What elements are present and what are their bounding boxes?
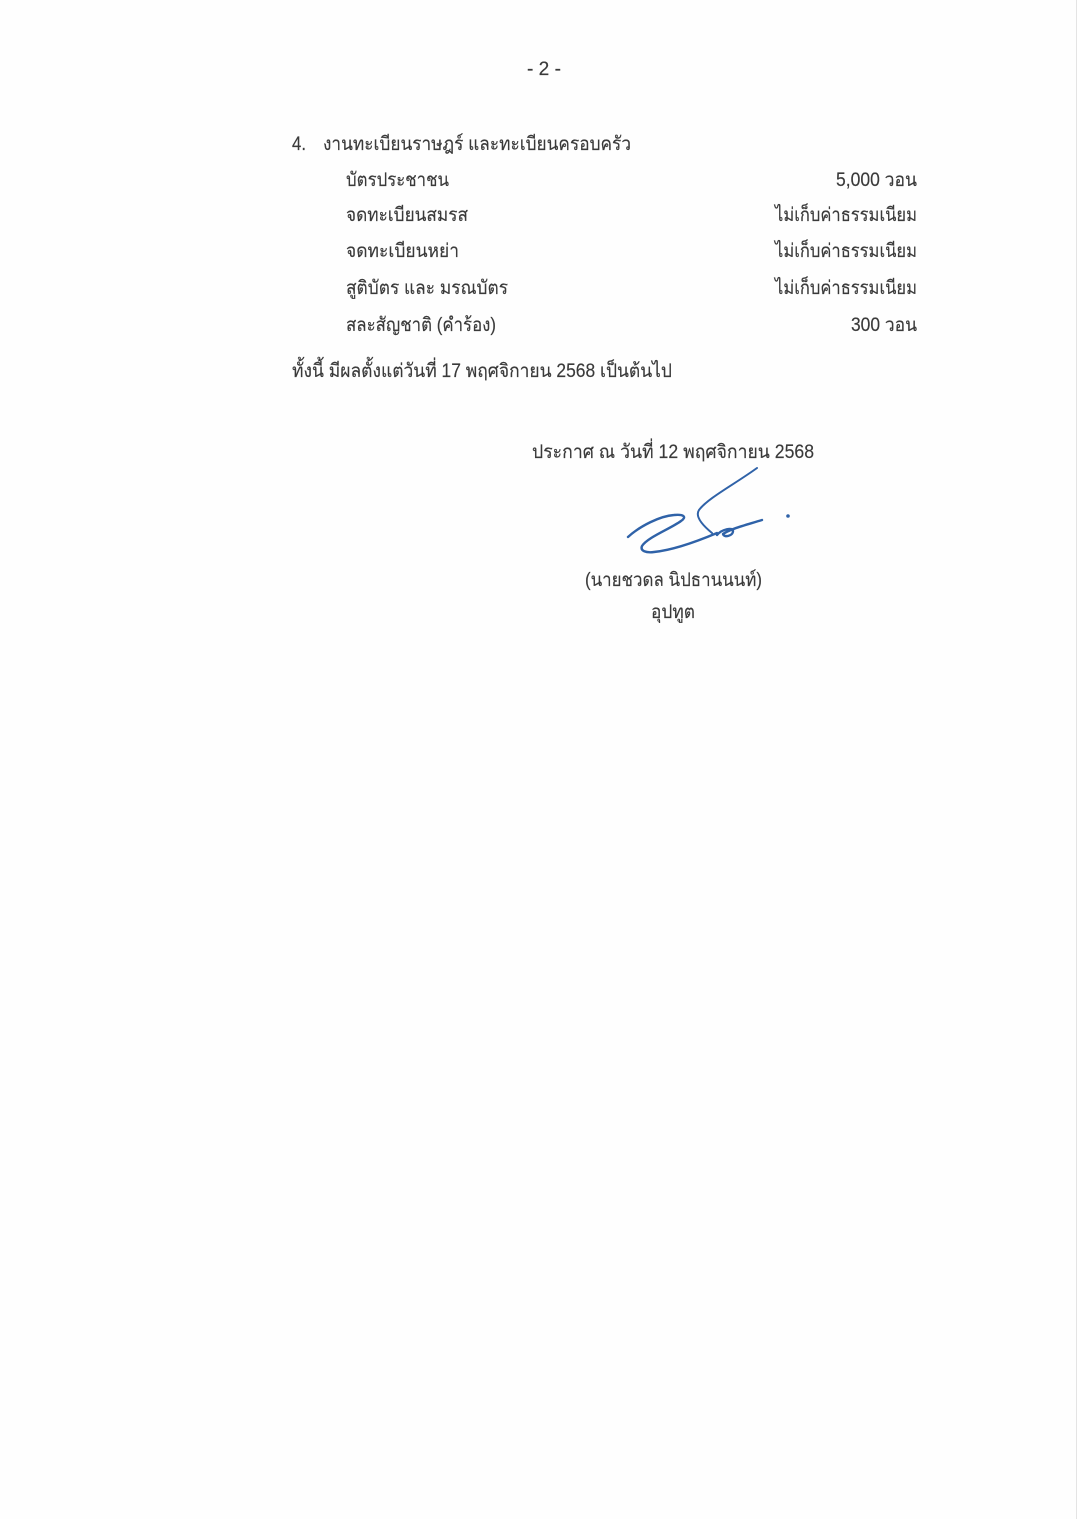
row: renunciation of nationality: 300 วอน	[851, 315, 917, 336]
row: birth and death certificates: สูติบัตร และ มรณบัตร	[346, 278, 508, 299]
row: birth and death certificates	[346, 275, 917, 299]
signatory name: (นายชวดล นิปธานนนท์)	[585, 569, 762, 591]
page number: - 2 -	[527, 59, 561, 80]
row: marriage registration: ไม่เก็บค่าธรรมเนียม	[773, 202, 917, 226]
row: marriage registration	[346, 202, 917, 226]
row: birth and death certificates: ไม่เก็บค่าธรรมเนียม	[773, 275, 917, 299]
row: marriage registration: จดทะเบียนสมรส	[346, 204, 468, 226]
announcement date: ประกาศ ณ วันที่ 12 พฤศจิกายน 2568	[532, 438, 814, 463]
row: identity card	[346, 170, 917, 191]
effective date statement: ทั้งนี้ มีผลตั้งแต่วันที่ 17 พฤศจิกายน 2568 เป็นต้นไป	[292, 357, 672, 382]
section heading: งานทะเบียนราษฎร์ และทะเบียนครอบครัว	[323, 133, 631, 155]
signature	[628, 468, 790, 552]
row: renunciation of nationality: สละสัญชาติ (คำร้อง)	[346, 315, 496, 336]
row: divorce registration: ไม่เก็บค่าธรรมเนียม	[773, 238, 917, 262]
signatory title: อุปทูต	[651, 602, 695, 624]
row: divorce registration: จดทะเบียนหย่า	[346, 240, 459, 262]
row: renunciation of nationality	[346, 315, 917, 336]
fee list	[346, 170, 917, 336]
row: identity card: บัตรประชาชน	[346, 170, 449, 191]
row: identity card: 5,000 วอน	[836, 170, 917, 191]
section heading: 4.	[292, 134, 306, 155]
row: divorce registration	[346, 238, 917, 262]
